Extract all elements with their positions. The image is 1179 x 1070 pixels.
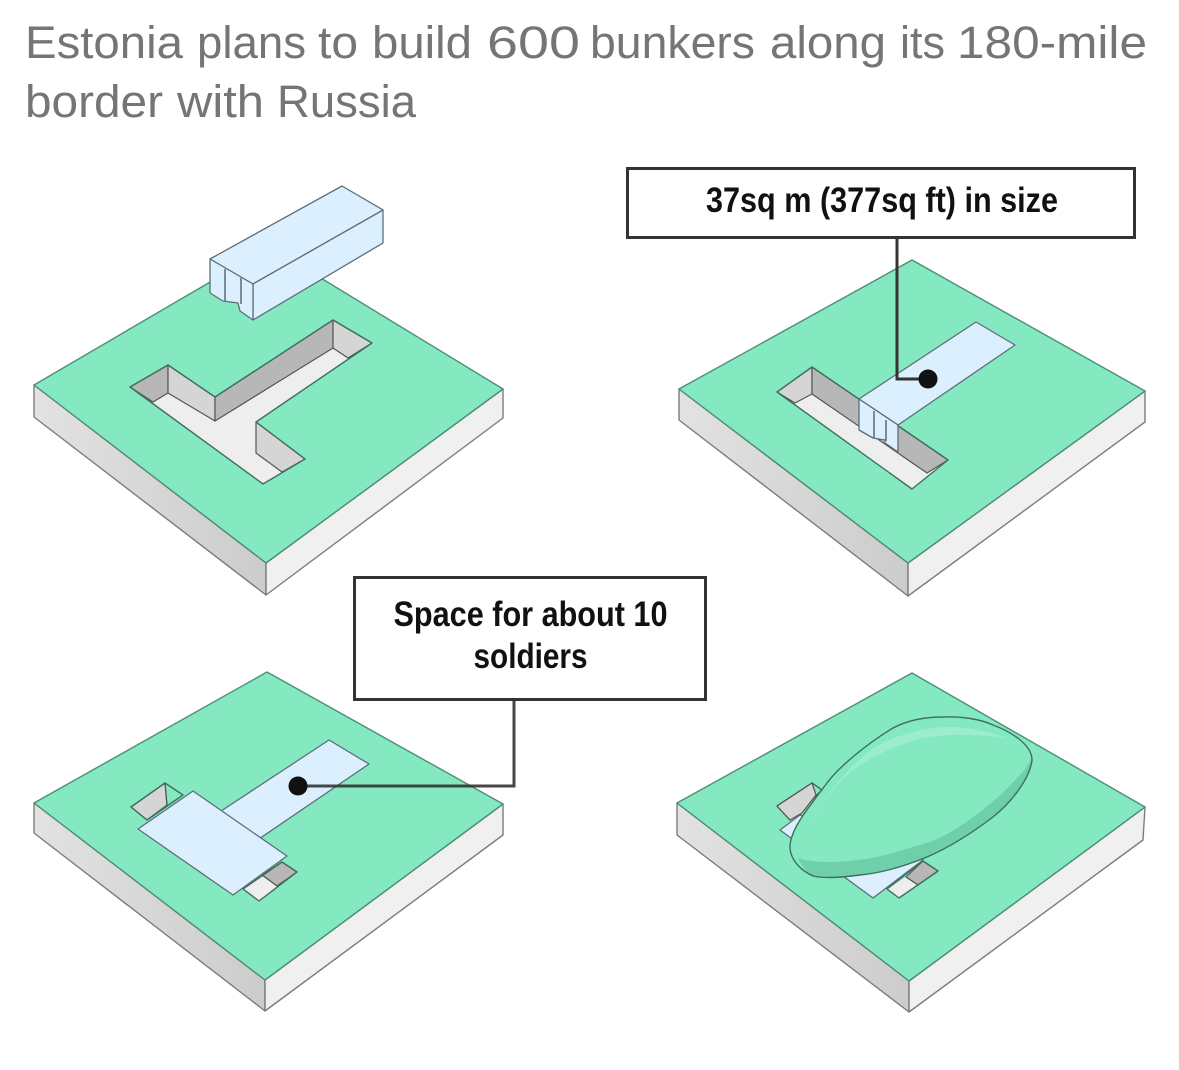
ground slab sides xyxy=(34,385,503,595)
title: plans xyxy=(197,17,306,68)
title: Estonia xyxy=(25,17,184,68)
panel: step 1, trench and bunker lifted above xyxy=(34,186,503,595)
callout: capacity xyxy=(288,578,706,796)
panel: step 3, roof slabs added xyxy=(34,672,503,1011)
ground top surface xyxy=(34,247,503,563)
title: along xyxy=(770,17,886,68)
callout: size xyxy=(628,168,1134,388)
bunker block xyxy=(210,186,383,320)
far trench opening xyxy=(131,783,183,820)
ground top surface xyxy=(34,672,503,980)
title: 600 xyxy=(487,17,580,68)
panel: step 2, bunker placed in trench xyxy=(679,260,1145,596)
title: 180-mile xyxy=(957,17,1147,68)
ground slab sides xyxy=(679,389,1145,596)
bunker block in place xyxy=(859,322,1015,452)
callout: size: 37sq m (377sq ft) in size xyxy=(706,181,1058,220)
title: build xyxy=(372,17,472,68)
title xyxy=(25,17,1147,127)
callout: capacity: Space for about 10 xyxy=(394,595,668,634)
visible trench and slab edges xyxy=(777,783,938,898)
T-shaped trench xyxy=(130,320,372,484)
soil mound xyxy=(790,717,1032,878)
ground slab sides xyxy=(677,803,1145,1012)
title: Russia xyxy=(277,76,417,127)
title: its xyxy=(900,17,945,68)
title: with xyxy=(176,76,264,127)
title: border xyxy=(25,76,163,127)
callout: capacity: soldiers xyxy=(474,637,588,676)
ground top surface xyxy=(679,260,1145,563)
title: bunkers xyxy=(590,17,755,68)
panel: step 4, bunker covered with soil mound xyxy=(677,673,1145,1012)
title: to xyxy=(318,17,358,68)
front concrete slab xyxy=(138,791,287,895)
ground slab sides xyxy=(34,803,503,1011)
far concrete slab xyxy=(215,740,369,843)
ground top surface xyxy=(677,673,1145,981)
trench xyxy=(777,367,948,489)
near trench opening xyxy=(243,862,297,901)
